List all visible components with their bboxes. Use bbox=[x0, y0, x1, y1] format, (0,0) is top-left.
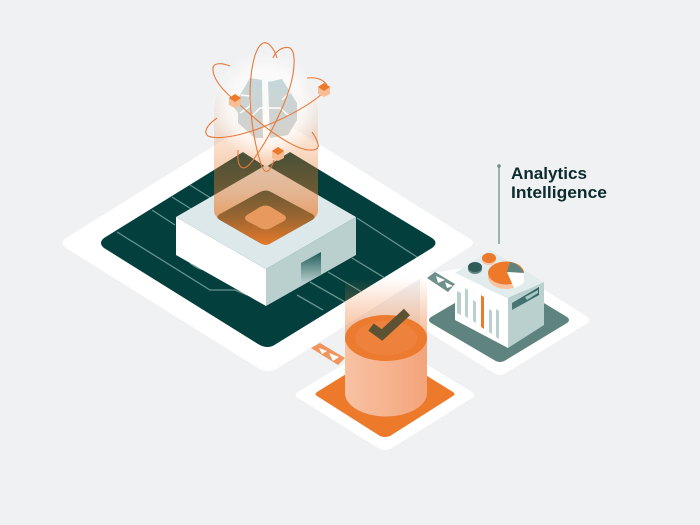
building top face bbox=[455, 250, 544, 298]
cylinder body bbox=[345, 338, 427, 416]
arrow tag: orange connector bbox=[311, 343, 345, 365]
heading: Intelligence bbox=[511, 183, 607, 202]
light beam with dome bbox=[214, 60, 318, 245]
block right face bbox=[266, 217, 356, 306]
icon: brain bbox=[233, 78, 297, 138]
building right face bbox=[508, 282, 544, 348]
building window bbox=[512, 287, 539, 310]
icon: check mark bbox=[371, 312, 407, 335]
orbit rings bbox=[206, 43, 327, 171]
analytics building bbox=[455, 250, 544, 348]
callout leader line bbox=[497, 164, 501, 244]
dark recess on block top bbox=[218, 190, 314, 244]
inner diamond on block top bbox=[245, 206, 286, 230]
panel: slate base bbox=[429, 278, 569, 362]
icon: cube bottom bbox=[272, 147, 284, 161]
dome highlight bbox=[212, 52, 320, 160]
panel: large white base plate bbox=[62, 112, 473, 371]
heading: Analytics bbox=[511, 164, 587, 183]
cylinder top inner ring bbox=[355, 321, 417, 355]
pie chart bbox=[488, 262, 524, 289]
orbit: wide tall ring bbox=[250, 43, 277, 171]
panel: dark circuit board bbox=[101, 152, 436, 347]
orbit: flat ring bbox=[206, 94, 322, 138]
panel: orange base bbox=[316, 352, 454, 437]
panel: right white base plate bbox=[420, 262, 589, 375]
orbit: diagonal ring bbox=[213, 64, 318, 150]
heading bbox=[511, 164, 607, 202]
panel: orange base white plate bbox=[296, 339, 474, 450]
block doorway bbox=[301, 252, 321, 285]
cylinder top bbox=[345, 315, 427, 361]
icon: cube right bbox=[318, 83, 330, 97]
icon: cube left bbox=[229, 94, 241, 108]
circuit lines bbox=[117, 185, 417, 310]
block top face bbox=[176, 165, 356, 269]
arrow tag: grey connector bbox=[427, 272, 455, 292]
cylinder beam bbox=[345, 278, 427, 338]
bar chart bbox=[457, 288, 499, 339]
orbit: tall ring bbox=[238, 47, 294, 168]
icon: orange disc bbox=[482, 253, 496, 265]
block left face bbox=[176, 217, 266, 306]
building left face bbox=[455, 273, 508, 348]
panel: central server block bbox=[176, 165, 356, 306]
window highlight bbox=[525, 290, 538, 300]
icon: dark disc bbox=[468, 262, 482, 274]
